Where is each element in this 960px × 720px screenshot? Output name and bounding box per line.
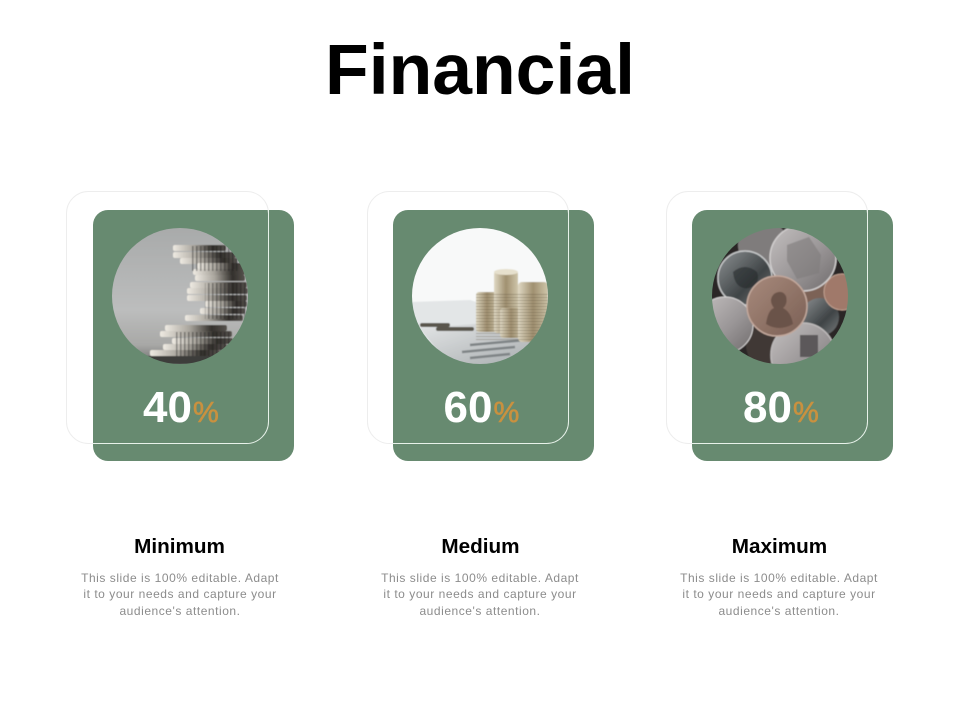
description: maximum: This slide is 100% editable. Adapt xyxy=(680,571,878,585)
description: minimum: audience's attention. xyxy=(119,604,241,618)
percentage: 60%: 60% xyxy=(444,383,519,432)
outline frame light: medium xyxy=(368,192,568,444)
heading: maximum: Maximum xyxy=(732,535,827,558)
text block: medium xyxy=(381,535,579,618)
photo: coin stack xyxy=(110,226,250,366)
description: medium: This slide is 100% editable. Adapt xyxy=(381,571,579,585)
description: minimum: This slide is 100% editable. Adapt xyxy=(81,571,279,585)
outline frame light: maximum xyxy=(666,192,868,444)
text block: minimum xyxy=(81,535,279,618)
description: maximum: it to your needs and capture your xyxy=(682,587,876,601)
panel: medium card xyxy=(393,210,594,461)
card background: minimum xyxy=(93,210,294,461)
description: medium: audience's attention. xyxy=(419,604,541,618)
heading: medium: Medium xyxy=(441,535,520,558)
photo: mixed coins xyxy=(712,228,848,364)
description: minimum: it to your needs and capture your xyxy=(83,587,277,601)
panel: maximum card xyxy=(692,210,893,461)
card background: maximum xyxy=(692,210,893,461)
photo: coins on paperwork xyxy=(410,226,550,366)
description: maximum: audience's attention. xyxy=(718,604,840,618)
title: Financial xyxy=(325,30,635,110)
text block: maximum xyxy=(680,535,878,618)
panel: minimum card xyxy=(93,210,294,461)
card background: medium xyxy=(393,210,594,461)
percentage: 40%: 40% xyxy=(143,383,219,432)
description: medium: it to your needs and capture your xyxy=(383,587,577,601)
outline frame light: minimum xyxy=(66,192,268,444)
heading: minimum: Minimum xyxy=(134,535,225,558)
percentage: 80%: 80% xyxy=(743,383,819,432)
